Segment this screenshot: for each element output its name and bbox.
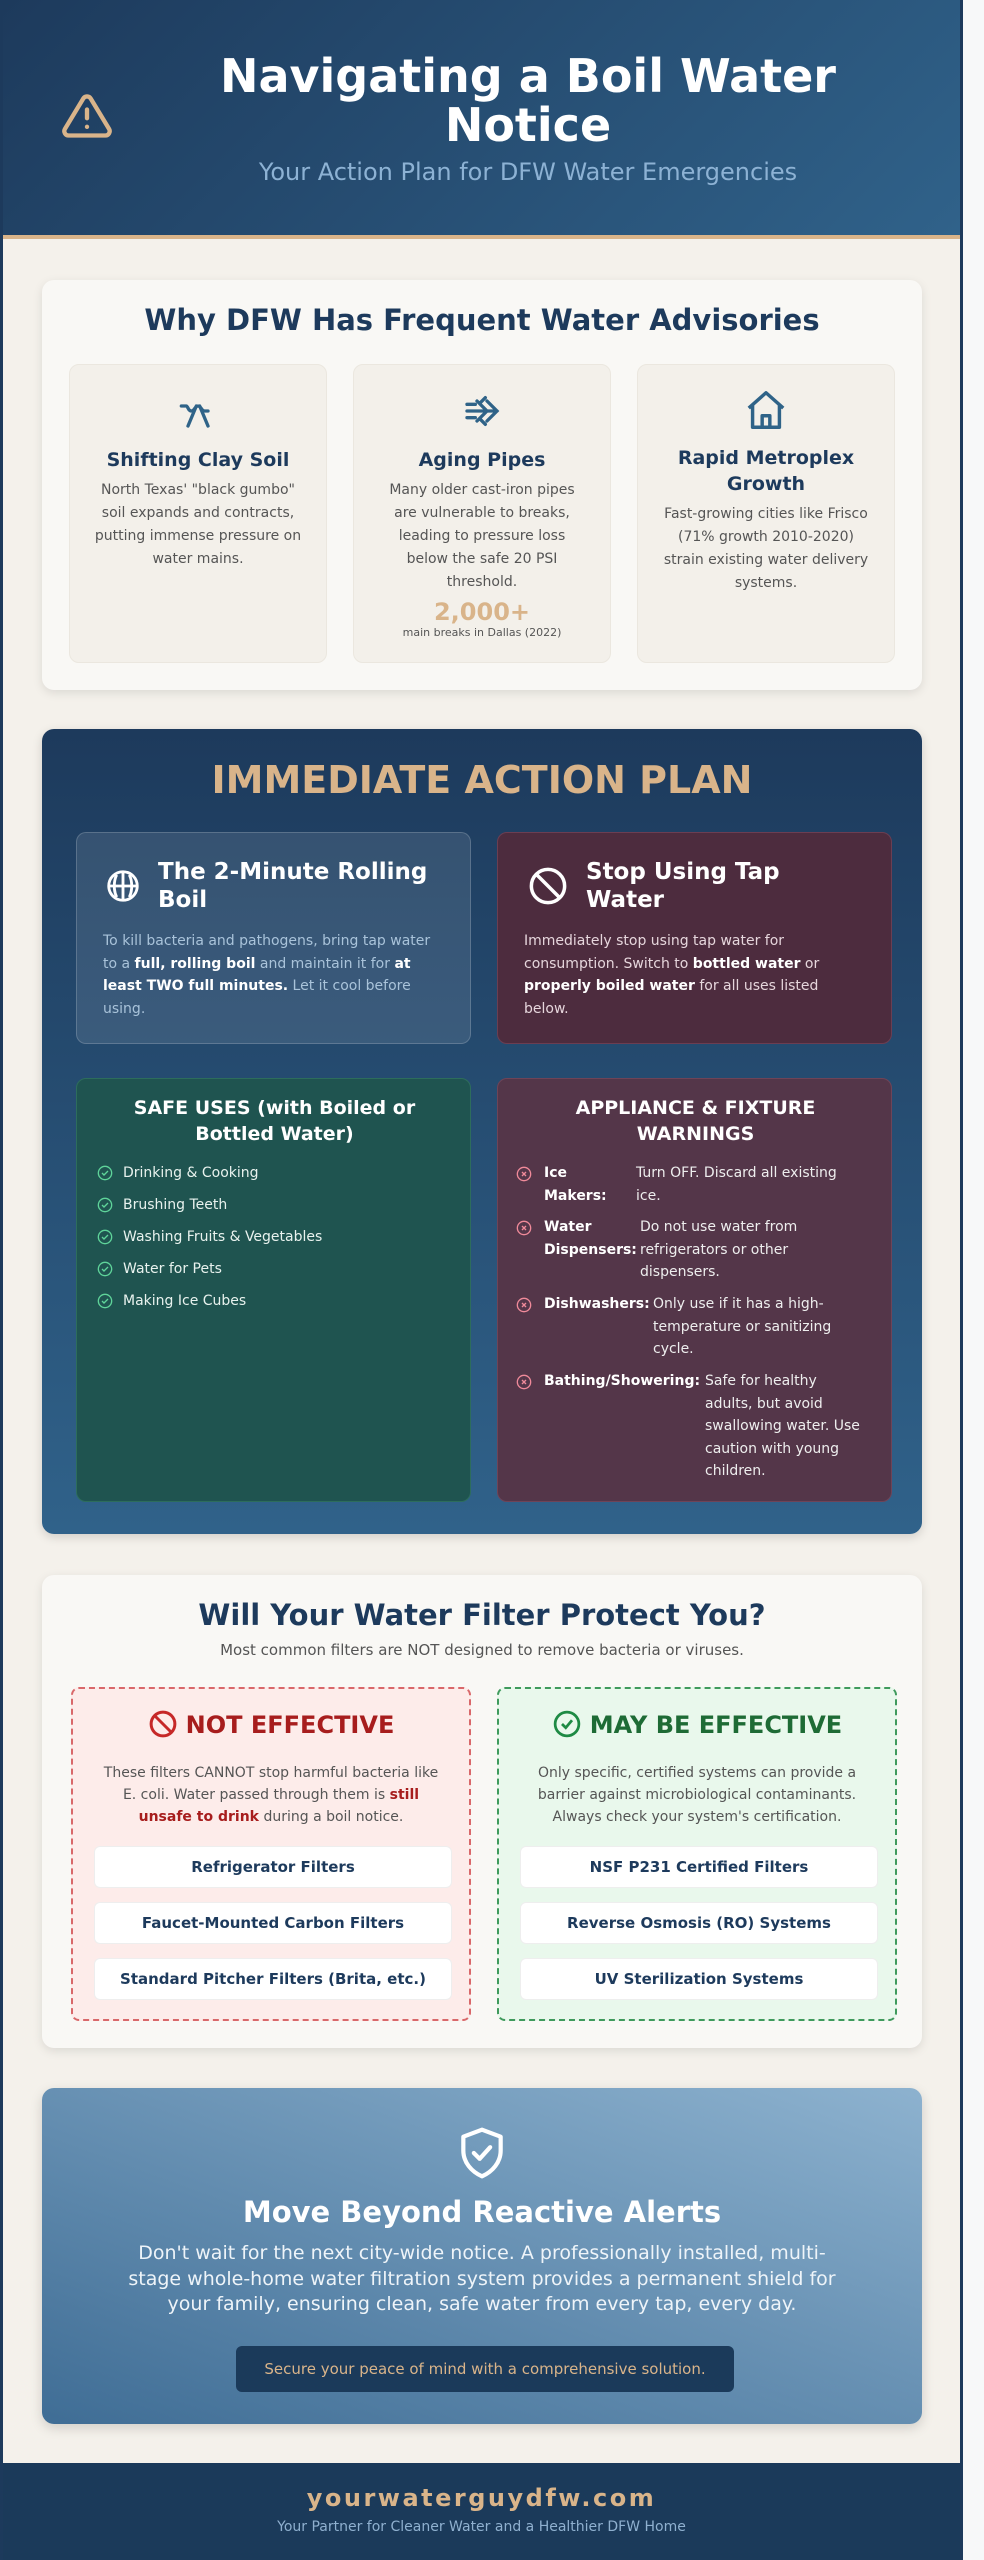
box: appliance warnings: Safe for healthy adults, but avoid swallowing water. Use caution with young children.: [705, 1373, 860, 1479]
warning items: Makers:: [544, 1188, 607, 1204]
list: Drinking & Cooking: [123, 1165, 259, 1181]
list: [98, 1165, 322, 1309]
list: Brushing Teeth: [123, 1197, 227, 1213]
text: These filters CANNOT stop harmful bacteria like E. coli. Water passed through them is still unsafe to drink during a boil notice.: [104, 1765, 438, 1825]
card: growth: [637, 364, 895, 663]
card: growth: Fast-growing cities like Frisco (71% growth 2010-2020) strain existing water delivery systems.: [664, 506, 868, 591]
button: [236, 2346, 734, 2392]
subtitle: Your Action Plan for DFW Water Emergencies: [259, 158, 797, 186]
box: not effective: [71, 1687, 471, 2021]
box: appliance warnings: [497, 1078, 892, 1502]
panel: move beyond: [42, 2088, 922, 2424]
icon: shield: [461, 2128, 503, 2178]
box: appliance warnings: Only use if it has a high-temperature or sanitizing cycle.: [653, 1296, 831, 1357]
icon: warning: [62, 94, 112, 138]
heading: Move Beyond Reactive Alerts: [243, 2195, 721, 2229]
heading: MAY BE EFFECTIVE: [590, 1711, 842, 1739]
icon: house: [748, 391, 784, 429]
card: aging pipes: Many older cast-iron pipes are vulnerable to breaks, leading to pressure loss below the safe 20 PSI threshold.: [389, 482, 575, 590]
icon: no: [530, 868, 566, 904]
warning items: Turn OFF. Discard all existing ice.: [636, 1165, 837, 1204]
heading: Will Your Water Filter Protect You?: [198, 1598, 766, 1632]
list: Water for Pets: [123, 1261, 222, 1277]
text: Only specific, certified systems can provide a barrier against microbiological contaminants. Always check your system's certification.: [538, 1765, 856, 1825]
card: clay soil: North Texas' "black gumbo" soil expands and contracts, putting immense pressure on water mains.: [95, 482, 301, 567]
heading: SAFE USES (with Boiled or: [134, 1097, 415, 1119]
box: appliance warnings: Do not use water from refrigerators or other dispensers.: [640, 1219, 797, 1280]
items: NSF P231 Certified Filters: [590, 1858, 808, 1876]
box: stop tap water: [497, 832, 892, 1044]
card: clay soil: Shifting Clay Soil: [107, 449, 289, 471]
button: Secure your peace of mind with a comprehensive solution.: [264, 2360, 706, 2378]
box: may be effective: [497, 1687, 897, 2021]
box: appliance warnings: Dispensers:: [544, 1242, 637, 1258]
box: may be effective: Reverse Osmosis (RO) Systems: [567, 1914, 831, 1932]
heading: Bottled Water): [195, 1123, 354, 1145]
box: stop tap water: Immediately stop using tap water for consumption. Switch to bottled water or properly boiled water for all uses listed below.: [524, 933, 819, 1016]
panel: why DFW: [42, 280, 922, 690]
heading: Why DFW Has Frequent Water Advisories: [144, 303, 820, 337]
box: appliance warnings: Water: [544, 1219, 591, 1235]
box: stop tap water: Stop Using Tap Water: [586, 859, 780, 913]
box: rolling boil: The 2-Minute Rolling Boil: [158, 859, 427, 913]
title: [220, 49, 836, 152]
list: Washing Fruits & Vegetables: [123, 1229, 322, 1245]
header: [3, 0, 960, 239]
box: appliance warnings: Bathing/Showering:: [544, 1373, 700, 1389]
stat: 2,000+: [434, 598, 530, 626]
items: [94, 1846, 452, 1888]
box: may be effective: UV Sterilization Systems: [595, 1970, 803, 1988]
title: Notice: [445, 98, 611, 152]
text: Don't wait for the next city-wide notice. A professionally installed, multi-stage whole-home water filtration system provides a permanent shield for your family, ensuring clean, safe water from every tap, every day.: [128, 2242, 836, 2315]
heading: NOT EFFECTIVE: [186, 1711, 394, 1739]
icon: pipes: [465, 396, 500, 426]
box: not effective: Standard Pitcher Filters (Brita, etc.): [120, 1970, 426, 1988]
box: rolling boil: [76, 832, 471, 1044]
tagline: Your Partner for Cleaner Water and a Healthier DFW Home: [277, 2519, 686, 2535]
icon: boil: [107, 870, 139, 902]
icon: soil: [180, 404, 210, 428]
card: aging pipes: [353, 364, 611, 663]
box: appliance warnings: Dishwashers:: [544, 1296, 650, 1312]
heading: IMMEDIATE ACTION PLAN: [212, 758, 752, 802]
heading: [134, 1097, 416, 1145]
box: safe uses: [76, 1078, 471, 1502]
heading: [576, 1097, 815, 1145]
subheading: Most common filters are NOT designed to remove bacteria or viruses.: [220, 1641, 744, 1659]
warning items: Ice: [544, 1165, 567, 1181]
title: Navigating a Boil Water: [220, 49, 836, 103]
panel: water filter: [42, 1575, 922, 2048]
card: clay soil: [69, 364, 327, 663]
box: not effective: Faucet-Mounted Carbon Filters: [142, 1914, 404, 1932]
items: [520, 1846, 878, 1888]
footer: [3, 2463, 960, 2560]
panel: immediate action plan: [42, 729, 922, 1534]
card: aging pipes: main breaks in Dallas (2022): [403, 626, 561, 639]
list: Making Ice Cubes: [123, 1293, 246, 1309]
card: aging pipes: Aging Pipes: [419, 449, 545, 471]
card: growth: Rapid Metroplex Growth: [678, 447, 854, 495]
site name: yourwaterguydfw.com: [307, 2484, 656, 2512]
heading: WARNINGS: [637, 1123, 754, 1145]
items: Refrigerator Filters: [191, 1858, 355, 1876]
warning items: [516, 1165, 837, 1204]
box: rolling boil: To kill bacteria and pathogens, bring tap water to a full, rolling boil and maintain it for at least TWO full minutes. Let it cool before using.: [103, 933, 430, 1016]
heading: APPLIANCE & FIXTURE: [576, 1097, 815, 1119]
